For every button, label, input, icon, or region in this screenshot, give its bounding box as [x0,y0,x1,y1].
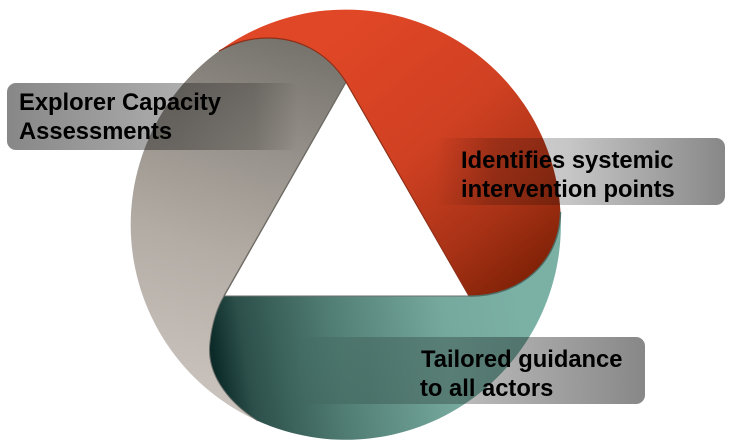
label: Tailored guidance to all actors: Tailored guidance [421,346,622,373]
label: Identifies systemic intervention points: intervention points [461,176,675,203]
segment: teal [209,212,561,440]
label: Tailored guidance to all actors: to all actors [420,375,553,402]
label: Explorer Capacity Assessments: Assessments [19,118,172,145]
label: Tailored guidance to all actors [300,337,645,404]
segment: gray [131,38,346,421]
label: Explorer Capacity Assessments: Explorer Capacity [19,89,222,116]
label: Explorer Capacity Assessments [7,83,298,150]
segment: red [219,10,560,296]
label: Identifies systemic intervention points [435,138,725,205]
label: Identifies systemic intervention points: Identifies systemic [461,147,674,174]
